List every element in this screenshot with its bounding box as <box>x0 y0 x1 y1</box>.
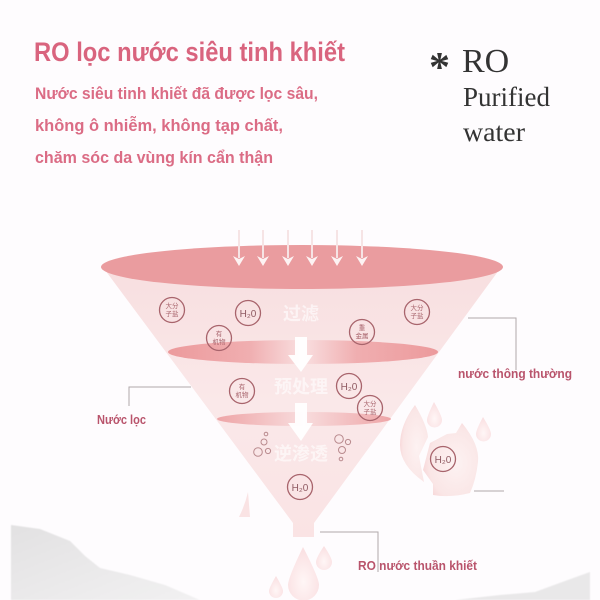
leader line: RO pure water <box>320 532 378 572</box>
water molecule: H₂0 <box>341 382 358 393</box>
salt molecule: 子盐 <box>166 308 179 318</box>
water molecule <box>288 474 312 500</box>
label: normal water: nước thông thường <box>458 366 572 381</box>
English subtitle: RO <box>462 43 509 80</box>
organic molecule: 有 <box>239 381 246 391</box>
heavy metal molecule <box>350 320 374 344</box>
stage label: pretreatment: 预处理 <box>274 373 328 399</box>
small drop <box>476 417 491 441</box>
stage label: reverse osmosis: 逆渗透 <box>274 440 328 466</box>
label: filtered water: Nước lọc <box>97 412 146 427</box>
big arrow 2 <box>288 403 313 441</box>
organic molecule: 机物 <box>236 389 249 399</box>
description text: không ô nhiễm, không tạp chất, <box>35 116 283 135</box>
salt molecule <box>358 396 382 420</box>
water molecule: H₂0 <box>292 483 309 494</box>
heavy metal molecule: 重 <box>359 322 366 332</box>
middle filter disc <box>168 340 438 364</box>
main shard <box>423 423 478 496</box>
small shard <box>239 492 250 517</box>
stage label: filtration: 过滤 <box>283 300 319 326</box>
description text: Nước siêu tinh khiết đã được lọc sâu, <box>35 84 318 103</box>
salt molecule <box>160 298 184 322</box>
label: RO pure water: RO nước thuần khiết <box>358 558 478 573</box>
lower filter disc <box>217 412 391 426</box>
salt molecule: 子盐 <box>410 310 424 320</box>
organic molecule <box>230 378 254 404</box>
water molecule: H₂0 <box>240 309 257 320</box>
organic molecule <box>206 326 232 350</box>
heavy metal molecule: 金属 <box>356 330 368 340</box>
salt molecule: 子盐 <box>364 406 377 416</box>
input arrows <box>233 230 368 266</box>
English subtitle <box>429 43 550 147</box>
water molecule <box>336 374 362 398</box>
salt molecule: 大分 <box>410 302 424 312</box>
salt molecule: 大分 <box>364 398 377 408</box>
leader line: filtered water <box>129 387 191 406</box>
small drop right <box>316 546 332 570</box>
funnel body <box>105 270 499 537</box>
organic molecule: 有 <box>216 328 223 338</box>
title: RO lọc nước siêu tinh khiết <box>34 37 345 67</box>
English subtitle: Purified <box>463 82 550 112</box>
bubbles <box>254 432 351 461</box>
leader line: drop <box>474 490 504 492</box>
water molecule: H₂0 <box>435 455 452 466</box>
water molecule <box>236 300 260 326</box>
English subtitle: water <box>463 117 525 147</box>
fabric texture: right <box>455 572 590 600</box>
molecule circles <box>160 298 430 500</box>
funnel <box>101 245 503 537</box>
left shard <box>400 405 428 482</box>
description text <box>35 84 318 167</box>
fabric texture: left <box>11 525 200 600</box>
leader line: normal water <box>468 318 516 370</box>
top filter disc <box>101 245 503 289</box>
main water drop <box>288 547 319 600</box>
organic molecule: 机物 <box>212 336 226 346</box>
broken water drop with molecule <box>400 405 478 496</box>
small drop <box>427 402 442 428</box>
big arrow 1 <box>288 337 313 372</box>
small drop left <box>269 576 283 598</box>
salt molecule <box>404 300 430 324</box>
description text: chăm sóc da vùng kín cẩn thận <box>35 148 273 167</box>
English subtitle: * <box>429 45 450 91</box>
salt molecule: 大分 <box>166 300 179 310</box>
